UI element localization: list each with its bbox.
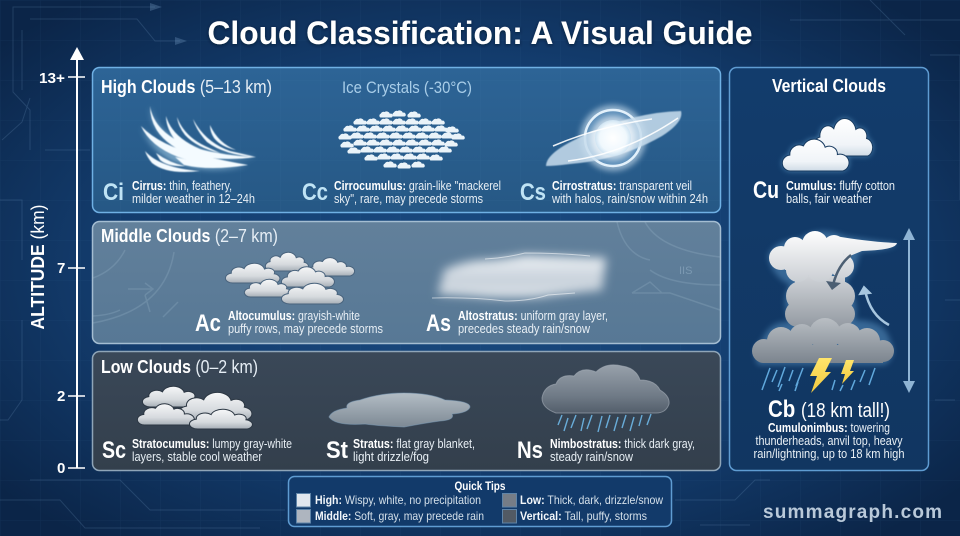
text: cirrostratus [551,179,708,206]
text: nimbostratus [550,437,695,464]
text: altostratus: Altostratus: uniform gray layer, [458,309,608,323]
panel: middle clouds [92,222,720,344]
text: altocumulus: Altocumulus: grayish-white [228,309,360,323]
text: stratocumulus: layers, stable cool weather [132,450,262,464]
text: cumulus [786,179,895,206]
text: cirrus: milder weather in 12–24h [132,192,255,206]
icon: cirrocumulus [338,110,465,168]
text: altostratus: precedes steady rain/snow [458,322,591,336]
text: cirrus [132,179,255,206]
text: stratocumulus [132,437,292,464]
panel: vertical clouds [730,68,928,470]
axis label: ALTITUDE (km) [28,205,48,329]
tick labels [39,70,65,477]
tick labels: 13+ [39,70,65,87]
panel: high clouds [92,68,720,212]
icon: cirrus [141,106,256,172]
text: cirrocumulus [334,179,501,206]
tip: middle: Middle: Soft, gray, may precede rain [315,509,484,523]
text: cumulonimbus [754,421,905,461]
altitude axis [28,47,85,477]
label: Ac: Ac [195,310,221,337]
ice crystals note: Ice Crystals (-30°C) [342,78,472,97]
icon: cirrostratus [546,105,681,171]
text: stratus: Stratus: flat gray blanket, [353,437,475,451]
anvil [769,231,897,282]
text: stratus: light drizzle/fog [353,450,429,464]
label: Cs: Cs [520,179,546,206]
text: stratus [353,437,475,464]
label: Cb: Cb (18 km tall!) [768,396,890,423]
heading: low clouds: Low Clouds (0–2 km) [101,357,258,377]
icon: cumulus [782,119,873,171]
tick labels: 7 [57,260,65,277]
label: Cu: Cu [753,177,779,204]
text: altocumulus [228,309,383,336]
icon: stratus [329,393,470,427]
heading: high clouds: High Clouds (5–13 km) [101,77,272,97]
icon: stratocumulus [137,386,252,429]
panel: quick tips [288,476,672,526]
heading: middle clouds: Middle Clouds (2–7 km) [101,226,278,246]
tower [785,276,855,328]
label: As: As [426,310,451,337]
text: cirrocumulus: Cirrocumulus: grain-like "mackerel [334,179,501,193]
base [752,318,894,363]
heading: quick tips: Quick Tips [454,481,506,493]
label: Cc: Cc [302,179,328,206]
text: cirrostratus: with halos, rain/snow within 24h [551,192,708,206]
tip: vertical: Vertical: Tall, puffy, storms [520,509,647,523]
icon: nimbostratus [542,365,669,432]
tick labels: 0 [57,460,65,477]
text: cumulus: Cumulus: fluffy cotton [786,179,895,193]
height arrow [903,228,915,393]
text: nimbostratus: steady rain/snow [550,450,634,464]
heading: vertical clouds: Vertical Clouds [772,76,886,96]
text: cumulus: balls, fair weather [786,192,872,206]
watermark: summagraph.com [763,502,942,523]
text: cirrocumulus: sky", rare, may precede storms [334,192,483,206]
icon: cumulonimbus [752,231,897,393]
icon: altostratus [432,253,606,301]
text: cirrostratus: Cirrostratus: transparent veil [552,179,692,193]
panel: low clouds [92,352,720,470]
text: cirrus: Cirrus: thin, feathery, [132,179,232,193]
icon: altocumulus [225,252,355,304]
title: Cloud Classification: A Visual Guide [208,15,752,51]
text: nimbostratus: Nimbostratus: thick dark gray, [550,437,695,451]
text: cumulonimbus: thunderheads, anvil top, heavy [756,434,903,448]
label: Ns: Ns [517,437,543,464]
tick labels: 2 [57,388,65,405]
text: altocumulus: puffy rows, may precede storms [228,322,383,336]
label: Ci: Ci [103,179,124,206]
text: cumulonimbus: rain/lightning, up to 18 km high [754,447,905,461]
label: St: St [326,437,348,464]
tip: high: High: Wispy, white, no precipitation [315,493,481,507]
text: cumulonimbus: Cumulonimbus: towering [768,421,890,435]
label: Sc: Sc [102,437,126,464]
faint map text: IIS [679,265,692,277]
tip: low: Low: Thick, dark, drizzle/snow [520,493,663,507]
text: altostratus [458,309,608,336]
text: stratocumulus: Stratocumulus: lumpy gray-white [132,437,292,451]
